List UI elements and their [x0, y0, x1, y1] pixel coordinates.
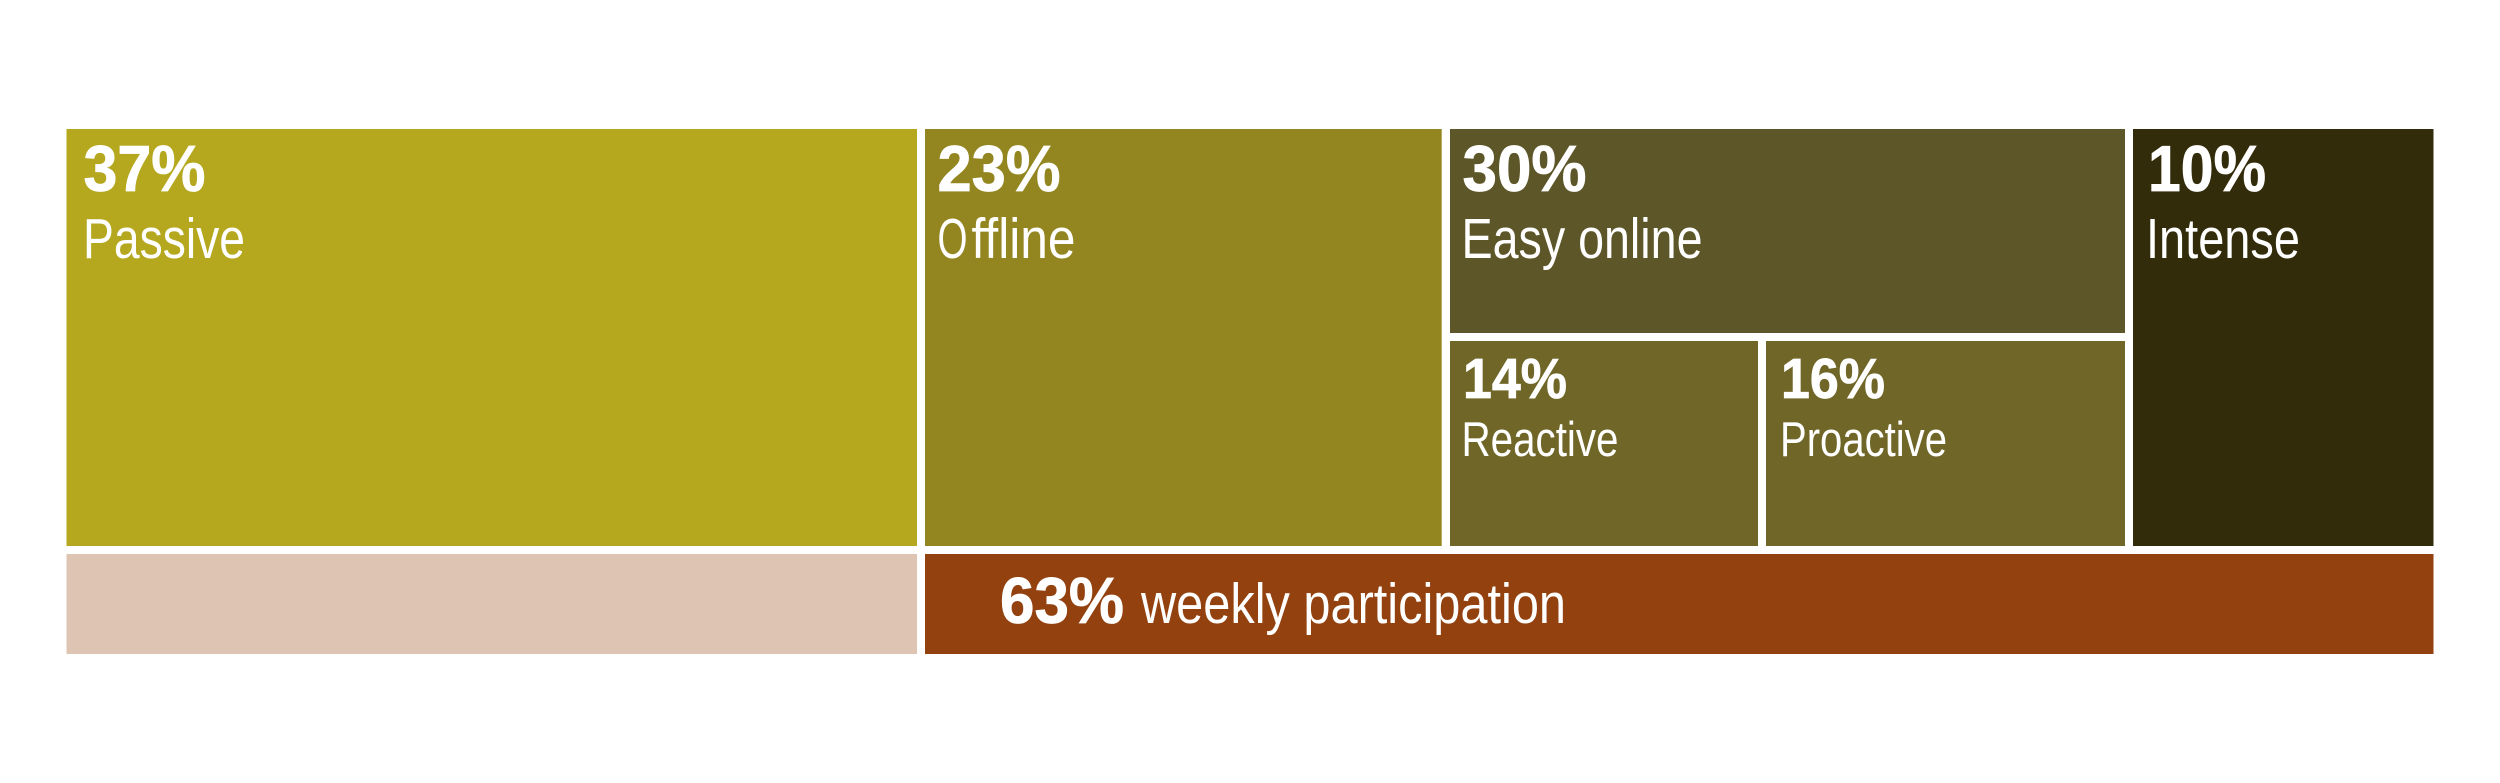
panel: Reactive [1450, 341, 1758, 546]
panel: Offline: O [938, 207, 968, 271]
label: 63% weekly participation: 63% [1000, 564, 1124, 637]
panel: Passive [66, 129, 917, 546]
panel: Passive: 37% [84, 132, 206, 205]
panel: Easy online: Easy online [1462, 207, 1702, 271]
panel: Intense: Intense [2146, 207, 2300, 271]
panel: Passive: Passive [83, 207, 245, 271]
panel: Proactive [1766, 341, 2125, 546]
panel: non-weekly remainder [66, 554, 917, 654]
panel: Offline: ffline [972, 207, 1076, 271]
panel: weekly participation [925, 554, 2434, 654]
panel: Easy online [1450, 129, 2125, 333]
panel: Intense: 10% [2148, 132, 2266, 205]
label: 63% weekly participation [1000, 564, 1566, 637]
panel: Proactive: Proactive [1780, 413, 1947, 467]
panel: Reactive: 14% [1463, 347, 1567, 411]
panel: Easy online: 30% [1462, 132, 1586, 205]
panel: Offline: 23% [938, 132, 1060, 205]
panel: Offline [925, 129, 1442, 546]
panel: Intense [2133, 129, 2434, 546]
panel: Reactive: Reactive [1462, 413, 1618, 467]
panel: Proactive: 16% [1781, 347, 1885, 411]
label: 63% weekly participation: weekly participation [1140, 572, 1566, 636]
